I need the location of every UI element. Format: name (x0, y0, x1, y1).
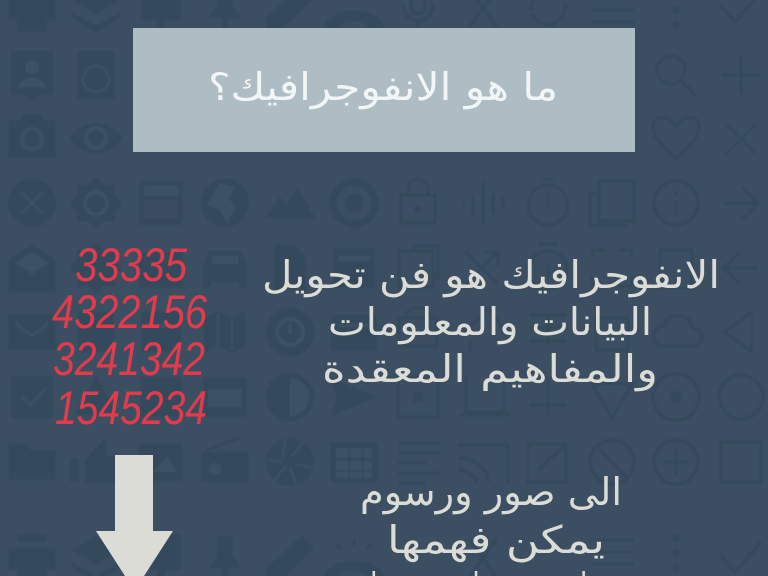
definition text block: الانفوجرافيك هو فن تحويل (262, 253, 720, 298)
second text block: الى صور ورسوم (360, 470, 622, 515)
red handwritten numbers: 3241342 (53, 332, 205, 385)
title text: ما هو الانفوجرافيك؟ (208, 65, 558, 110)
definition text block: البيانات والمعلومات (328, 300, 652, 345)
arrow pointing down (96, 455, 173, 576)
second text block: يمكن فهمها (387, 518, 605, 563)
second text block (270, 470, 622, 576)
red handwritten numbers: 4322156 (52, 285, 208, 338)
definition text block (262, 253, 720, 392)
definition text block: والمفاهيم المعقدة (322, 347, 658, 392)
red handwritten numbers: 1545234 (55, 381, 207, 434)
red handwritten numbers: 33335 (75, 238, 188, 291)
red handwritten numbers (52, 238, 208, 434)
title panel (133, 28, 635, 152)
